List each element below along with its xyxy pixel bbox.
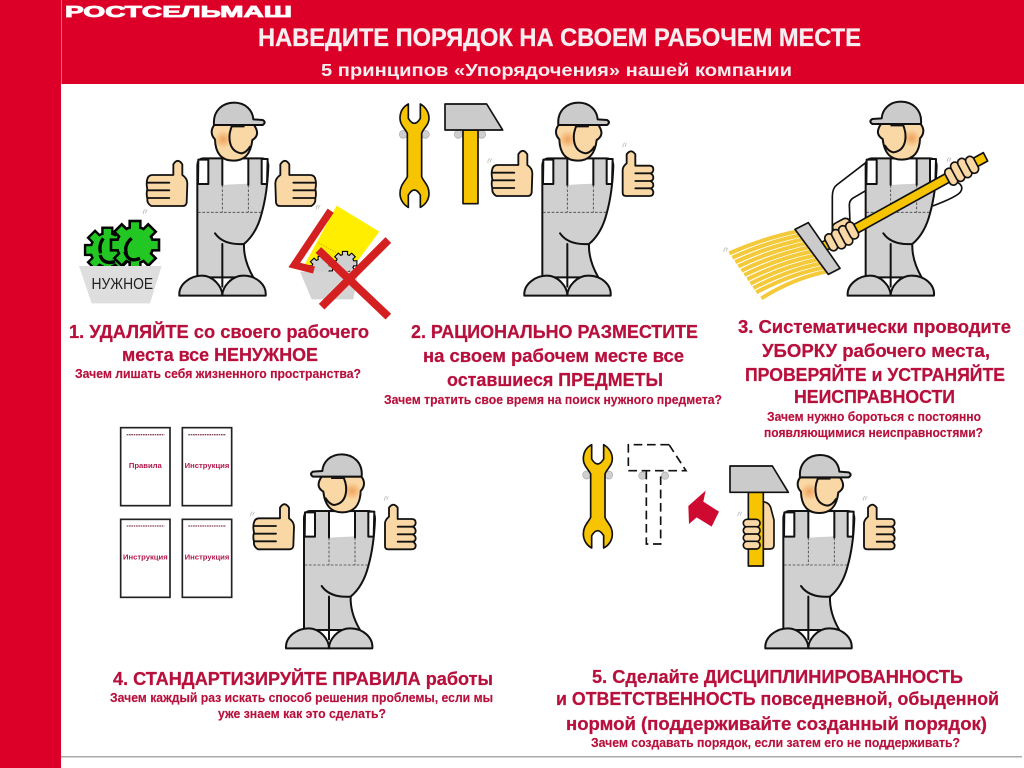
dashed hammer outline [628, 445, 686, 544]
right hand [385, 505, 416, 549]
document: instruction 1 [182, 428, 232, 506]
document: rules [121, 428, 170, 506]
illustration 3: worker sweeping with broom [724, 102, 988, 298]
text block 3: НЕИСПРАВНОСТИ [794, 387, 955, 407]
illustration 1: worker, needed and unneeded items [79, 103, 388, 317]
text block 1: места все НЕНУЖНОЕ [122, 345, 318, 365]
illustration 2: worker with wrench and hammer [399, 103, 653, 296]
text block 1 [69, 321, 369, 381]
red arrow [688, 491, 719, 527]
bottom rule [61, 756, 1022, 758]
right thumb-up hand [275, 161, 316, 206]
worker [286, 454, 375, 648]
text block 2: на своем рабочем месте все [423, 346, 684, 366]
text block 3: ПРОВЕРЯЙТЕ и УСТРАНЯЙТЕ [745, 364, 1005, 385]
text block 2 [384, 322, 722, 407]
upper hand [942, 153, 980, 187]
text block 5: нормой (поддерживайте созданный порядок) [566, 714, 987, 734]
text block 3 [738, 317, 1011, 440]
worker [765, 455, 854, 648]
left hand [253, 504, 294, 549]
text block 4: Зачем каждый раз искать способ решения проблемы, если мы [110, 691, 493, 705]
logo: РОСТСЕЛЬМАШ [65, 4, 292, 21]
subtitle: 5 принципов «Упорядочения» нашей компании [321, 60, 792, 80]
broom head and handle [795, 153, 988, 274]
worker [179, 103, 268, 296]
text block 2: Зачем тратить свое время на поиск нужного предмета? [384, 393, 722, 407]
text block 2: 2. РАЦИОНАЛЬНО РАЗМЕСТИТЕ [411, 322, 698, 342]
text block 5 [556, 667, 999, 750]
document: instruction 1: Инструкция [185, 461, 229, 470]
left thumb-up hand [147, 161, 187, 206]
text block 4: 4. СТАНДАРТИЗИРУЙТЕ ПРАВИЛА работы [113, 668, 493, 689]
text block 1: 1. УДАЛЯЙТЕ со своего рабочего [69, 321, 369, 342]
lower hand [820, 216, 861, 254]
wrench [399, 104, 429, 207]
header band [61, 0, 1024, 84]
text block 3: 3. Систематически проводите [738, 317, 1011, 337]
hand holding hammer [730, 466, 788, 566]
basket: needed: НУЖНОЕ [91, 276, 153, 293]
text block 1: Зачем лишать себя жизненного пространства? [75, 367, 361, 381]
document: rules: Правила [129, 461, 163, 470]
broom bristles [729, 231, 827, 298]
document: instruction 3 [182, 519, 232, 597]
text block 2: оставшиеся ПРЕДМЕТЫ [447, 370, 663, 390]
text block 4: уже знаем как это сделать? [218, 707, 386, 721]
wrench [583, 445, 613, 548]
text block 3: Зачем нужно бороться с постоянно [767, 410, 981, 424]
green gears in basket [86, 222, 158, 271]
left red strip [0, 0, 61, 768]
document: instruction 2 [121, 519, 170, 597]
right hand [623, 151, 653, 196]
document: instruction 2: Инструкция [123, 552, 168, 561]
text block 5: Зачем создавать порядок, если затем его не поддерживать? [591, 736, 960, 750]
crossed out yellow paper and basket [294, 206, 388, 317]
worker [524, 103, 613, 296]
title: НАВЕДИТЕ ПОРЯДОК НА СВОЕМ РАБОЧЕМ МЕСТЕ [258, 24, 861, 52]
illustration 5: tool outline, arrow and worker holding hammer [583, 445, 895, 648]
right hand [864, 505, 895, 549]
hammer [445, 104, 503, 204]
text block 4 [110, 668, 493, 721]
document: instruction 3: Инструкция [185, 552, 229, 561]
basket: needed [79, 266, 162, 303]
text block 3: появляющимися неисправностями? [764, 426, 983, 440]
left hand [492, 151, 532, 196]
worker [832, 102, 962, 296]
text block 5: и ОТВЕТСТВЕННОСТЬ повседневной, обыденной [556, 689, 999, 709]
illustration 4: documents and worker [121, 428, 416, 648]
text block 5: 5. Сделайте ДИСЦИПЛИНИРОВАННОСТЬ [592, 667, 963, 687]
text block 3: УБОРКУ рабочего места, [762, 341, 990, 361]
